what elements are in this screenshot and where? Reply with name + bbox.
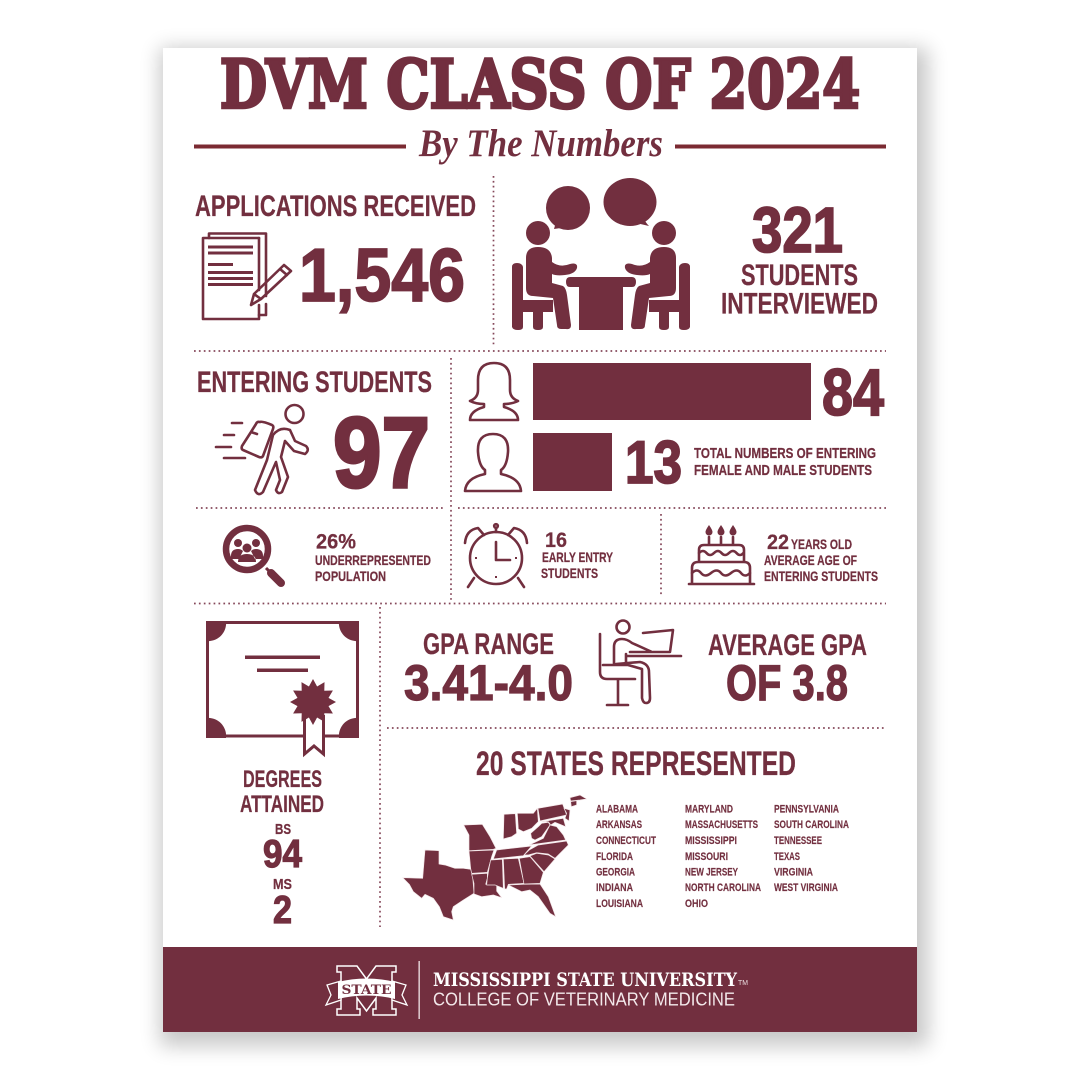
stat: average age: AVERAGE AGE OF	[764, 552, 857, 568]
number: 13: 13	[625, 429, 682, 496]
stat: underrepresented population: POPULATION	[315, 568, 386, 584]
heading: 20 states represented: 20 STATES REPRESENTED	[476, 745, 796, 783]
panel: entering students	[197, 366, 432, 509]
panel: degrees attained: ATTAINED	[240, 791, 324, 818]
stat: average age: YEARS OLD	[791, 536, 852, 552]
panel: students interviewed	[512, 178, 878, 330]
panel: degrees attained: 94	[263, 833, 302, 876]
state list: TENNESSEE	[774, 835, 822, 847]
state list: WEST VIRGINIA	[774, 882, 838, 894]
bar: female	[533, 363, 811, 420]
panel: degrees attained: BS	[275, 821, 291, 838]
stat: early entry students: 16	[545, 529, 567, 552]
panel: female and male counts	[465, 355, 884, 496]
number: 84: 84	[822, 355, 884, 429]
title: DVM CLASS OF 2024	[220, 46, 860, 124]
average GPA	[708, 629, 867, 711]
state list: CONNECTICUT	[596, 835, 656, 847]
state list: PENNSYLVANIA	[774, 804, 839, 816]
icon: diploma	[206, 621, 359, 754]
stat: average age: 22	[767, 531, 789, 554]
average GPA: AVERAGE GPA	[708, 629, 867, 662]
wordmark	[433, 969, 748, 1010]
state list: SOUTH CAROLINA	[774, 819, 849, 831]
wordmark: COLLEGE OF VETERINARY MEDICINE	[433, 990, 735, 1010]
bar: male	[533, 433, 612, 491]
stat: early entry students	[465, 524, 613, 587]
stat: underrepresented population: 26%	[316, 530, 356, 554]
state list: VIRGINIA	[774, 866, 813, 878]
panel: degrees attained: 2	[273, 889, 292, 932]
number: 97: 97	[333, 397, 430, 509]
icon: document and pen	[203, 234, 291, 319]
stat: early entry students: STUDENTS	[541, 565, 598, 581]
wordmark: MISSISSIPPI STATE UNIVERSITY	[433, 969, 737, 991]
panel: degrees attained: DEGREES	[243, 766, 322, 793]
state list: NORTH CAROLINA	[685, 882, 761, 894]
icon: birthday cake	[689, 525, 754, 584]
GPA range: 3.41-4.0	[404, 655, 573, 711]
state list: MASSACHUSETTS	[685, 819, 758, 831]
icon: student at desk	[600, 620, 681, 705]
logo: M State	[326, 966, 407, 1015]
stat: underrepresented population	[226, 528, 431, 584]
state list: NEW JERSEY	[685, 866, 738, 878]
state list: FLORIDA	[596, 851, 633, 863]
stat: average age: ENTERING STUDENTS	[764, 568, 878, 584]
state list: GEORGIA	[596, 866, 635, 878]
number: 321: 321	[752, 194, 843, 266]
note: totals: FEMALE AND MALE STUDENTS	[694, 462, 872, 479]
icon: magnifier with people	[226, 528, 281, 583]
footer band	[163, 947, 917, 1032]
panel: degrees attained: MS	[273, 876, 292, 893]
GPA range: GPA RANGE	[423, 628, 554, 661]
average GPA: OF 3.8	[726, 655, 848, 711]
subtitle with rules	[194, 122, 886, 165]
state list	[596, 804, 849, 910]
panel: GPA	[404, 620, 867, 711]
state list: INDIANA	[596, 882, 633, 894]
note: totals	[694, 445, 876, 479]
panel: states represented	[403, 745, 849, 920]
heading: applications received: APPLICATIONS RECEIVED	[195, 190, 476, 223]
state list: TEXAS	[774, 851, 800, 863]
note: totals: TOTAL NUMBERS OF ENTERING	[694, 445, 876, 462]
state list: LOUISIANA	[596, 898, 643, 910]
icon: female	[470, 363, 518, 420]
stat: early entry students: EARLY ENTRY	[542, 549, 613, 565]
icon: interview at table	[512, 178, 690, 330]
panel: applications received	[195, 190, 476, 319]
GPA range	[404, 628, 573, 711]
state list: ALABAMA	[596, 804, 638, 816]
panel: degrees attained	[206, 621, 359, 932]
state list: MISSOURI	[685, 851, 728, 863]
number: 1,546: 1,546	[299, 233, 465, 317]
icon: running student	[216, 405, 308, 494]
state list: MARYLAND	[685, 804, 733, 816]
map: represented states	[403, 795, 587, 920]
stat: underrepresented population: UNDERREPRESENTED	[315, 552, 431, 568]
subtitle with rules: By The Numbers	[418, 122, 663, 165]
icon: male	[465, 434, 521, 491]
state list: MISSISSIPPI	[685, 835, 737, 847]
state list: ARKANSAS	[596, 819, 642, 831]
panel: students interviewed: INTERVIEWED	[721, 288, 878, 320]
poster card	[163, 48, 917, 1032]
heading: entering students: ENTERING STUDENTS	[197, 366, 432, 399]
label: students interviewed: STUDENTS	[741, 259, 858, 292]
logo: M State: STATE	[342, 983, 392, 998]
stat: average age	[689, 525, 878, 584]
icon: alarm clock	[465, 524, 527, 587]
state list: OHIO	[685, 898, 708, 910]
wordmark: TM	[738, 980, 748, 987]
